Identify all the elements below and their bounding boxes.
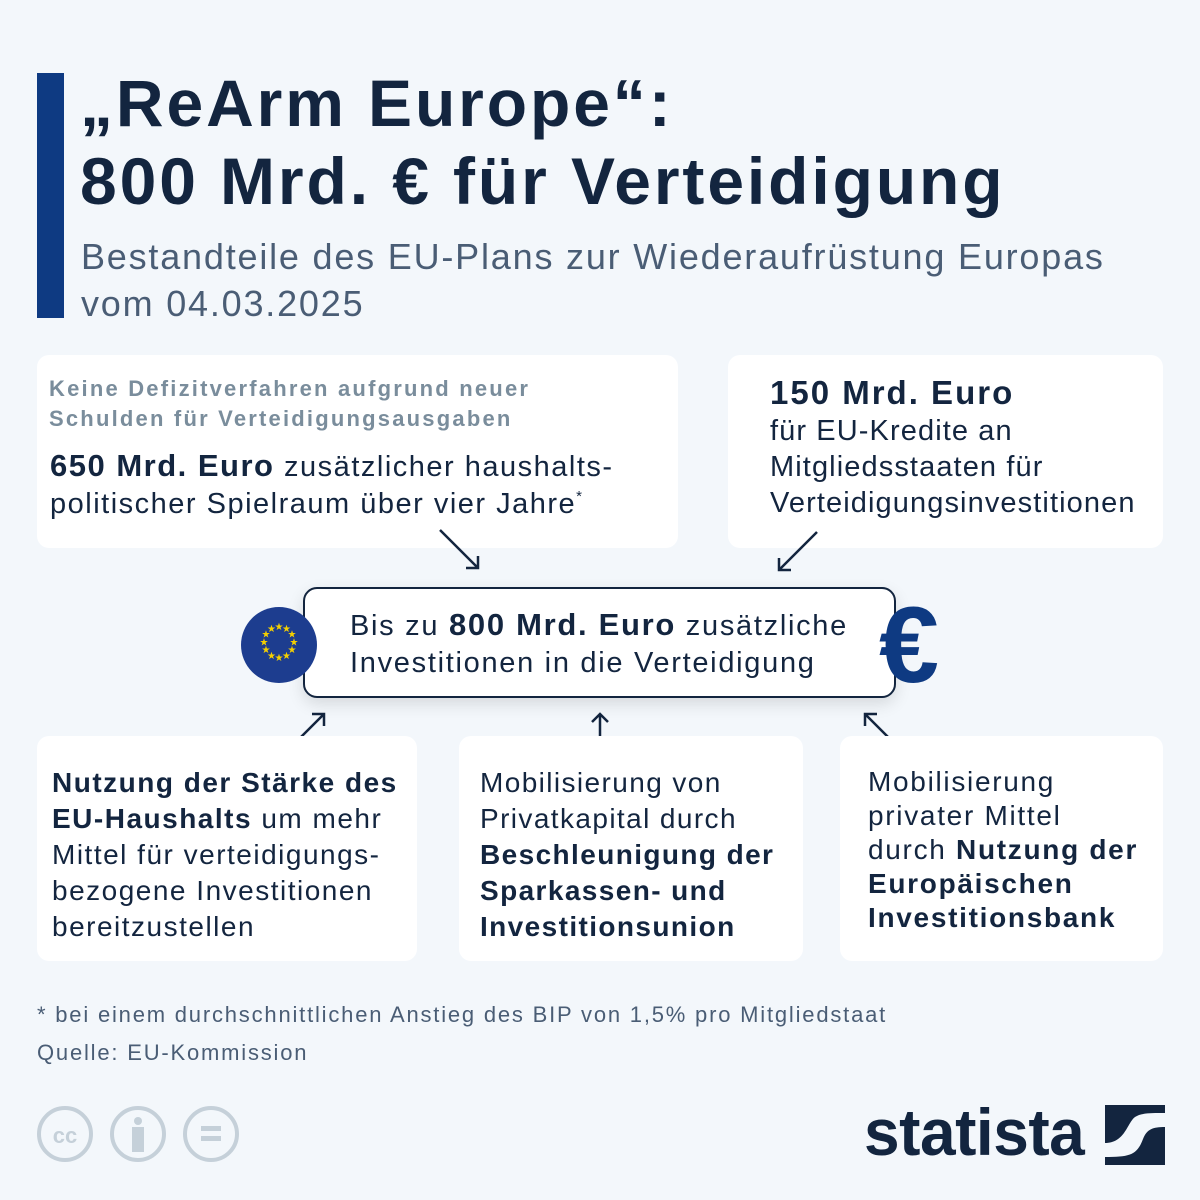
panel: bottom-left: bezogene Investitionen <box>52 875 373 906</box>
icon: EU flag: ★ <box>267 624 276 635</box>
panel: bottom-left: Mittel für verteidigungs- <box>52 839 381 870</box>
icon: EU flag: ★ <box>262 645 271 656</box>
subtitle: Bestandteile des EU-Plans zur Wiederaufrüstung Europas <box>81 236 1105 277</box>
title: „ReArm Europe“: <box>80 66 674 140</box>
accent bar <box>37 73 64 318</box>
icon: EU flag: ★ <box>260 638 269 648</box>
center box <box>303 587 896 698</box>
icons: licence <box>37 1106 239 1162</box>
icon: EU flag <box>241 607 317 683</box>
icon: EU flag: ★ <box>275 622 284 633</box>
title <box>80 66 1005 218</box>
icon: EU flag: ★ <box>267 651 276 662</box>
title: 800 Mrd. € für Verteidigung <box>80 144 1005 218</box>
text: 650 Mrd: politischer Spielraum über vier Jahre* <box>50 488 584 520</box>
text: 150 Mrd: 150 Mrd. Euro <box>770 374 1014 411</box>
text: 800 Mrd <box>350 607 848 679</box>
logo mark <box>1105 1105 1165 1165</box>
footnote: * bei einem durchschnittlichen Anstieg des BIP von 1,5% pro Mitgliedstaat <box>37 1002 887 1027</box>
icon: EU flag: ★ <box>290 638 299 648</box>
icons: licence: cc <box>53 1123 77 1148</box>
panel: bottom-right: Investitionsbank <box>868 902 1116 933</box>
icon: EU flag: ★ <box>275 653 284 664</box>
panel: bottom-middle: Investitionsunion <box>480 911 736 942</box>
panel: bottom-middle: Privatkapital durch <box>480 803 737 834</box>
text: 150 Mrd <box>770 374 1136 519</box>
panel: bottom-right: Mobilisierung <box>868 766 1055 797</box>
panel: bottom-middle <box>459 736 803 961</box>
panel: bottom-left: EU-Haushalts um mehr <box>52 803 382 834</box>
panel: bottom-right <box>840 736 1163 961</box>
logo: statista: statista <box>864 1095 1084 1169</box>
icon: euro sign: € <box>879 584 939 705</box>
panel: bottom-left <box>37 736 417 961</box>
panel: bottom-middle: Mobilisierung von <box>480 767 722 798</box>
text: deficit note <box>49 376 530 431</box>
footnote: Quelle: EU-Kommission <box>37 1040 308 1065</box>
icon: EU flag: ★ <box>288 630 297 640</box>
panel: top-left <box>37 355 678 548</box>
text: 650 Mrd: 650 Mrd. Euro zusätzlicher haushalts- <box>50 448 614 483</box>
subtitle: vom 04.03.2025 <box>81 283 364 324</box>
icon: EU flag: ★ <box>288 645 297 656</box>
text: 650 Mrd <box>50 448 614 520</box>
panel: bottom-right: privater Mittel <box>868 800 1062 831</box>
panel: bottom-left: bereitzustellen <box>52 911 255 942</box>
panel: bottom-middle: Beschleunigung der <box>480 839 774 870</box>
text: 800 Mrd: Bis zu 800 Mrd. Euro zusätzliche <box>350 607 848 642</box>
text: 150 Mrd: Verteidigungsinvestitionen <box>770 487 1136 519</box>
panel: bottom-right: durch Nutzung der <box>868 834 1138 865</box>
panel: top-right <box>728 355 1163 548</box>
text: deficit note: Keine Defizitverfahren aufgrund neuer <box>49 376 530 401</box>
icon: EU flag: ★ <box>282 624 291 635</box>
footnote <box>37 1002 887 1065</box>
icon: EU flag: ★ <box>282 651 291 662</box>
panel: bottom-left: Nutzung der Stärke des <box>52 767 398 798</box>
subtitle <box>81 236 1105 324</box>
panel: bottom-middle: Sparkassen- und <box>480 875 727 906</box>
text: 800 Mrd: Investitionen in die Verteidigung <box>350 647 816 679</box>
text: deficit note: Schulden für Verteidigungsausgaben <box>49 406 513 431</box>
icon: EU flag: ★ <box>262 630 271 640</box>
text: 150 Mrd: für EU-Kredite an <box>770 415 1013 447</box>
panel: bottom-right: Europäischen <box>868 868 1074 899</box>
text: 150 Mrd: Mitgliedsstaaten für <box>770 451 1043 483</box>
